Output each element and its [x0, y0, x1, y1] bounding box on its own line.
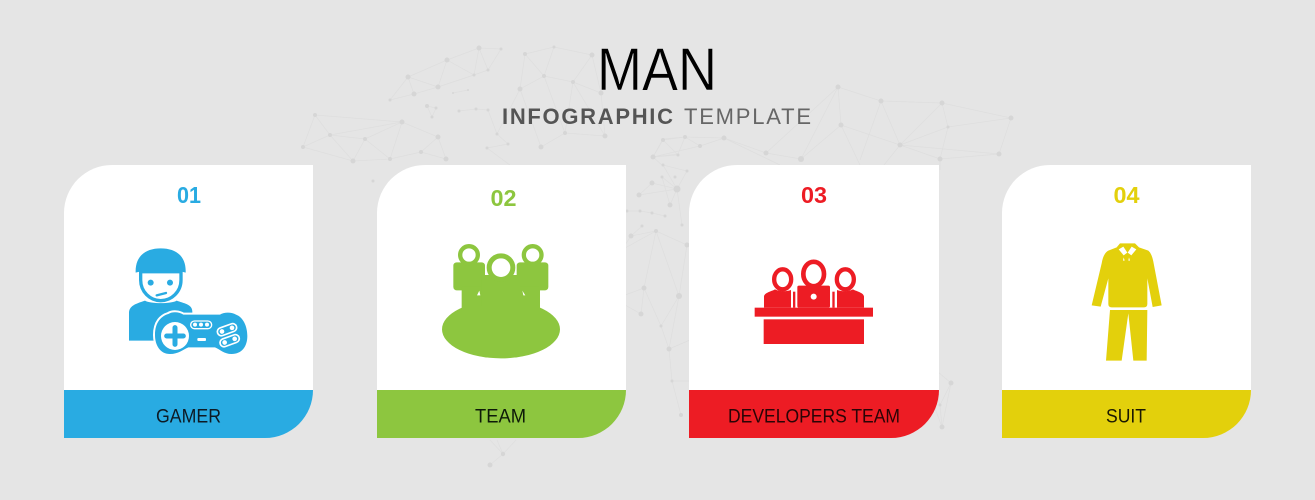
panel label band: team — [377, 390, 626, 438]
subtitle — [502, 104, 811, 129]
number 02: 02 — [490, 185, 516, 211]
panel: gamer — [64, 165, 313, 438]
label: developers team: DEVELOPERS TEAM — [728, 406, 900, 428]
number 03: 03 — [801, 182, 827, 208]
subtitle: TEMPLATE — [684, 104, 811, 129]
panel: developers team — [689, 165, 939, 438]
label: suit: SUIT — [1106, 406, 1146, 428]
panel label band: suit — [1002, 390, 1251, 438]
icon: team around table — [442, 246, 560, 358]
panel: team — [377, 165, 626, 438]
number 04: 04 — [1114, 182, 1140, 208]
icon: suit — [1092, 243, 1162, 361]
icon: gamer with controller — [129, 248, 247, 354]
title: MAN — [597, 36, 717, 103]
panel label band: gamer — [64, 390, 313, 438]
label: gamer: GAMER — [156, 406, 221, 428]
number 01: 01 — [177, 182, 201, 208]
icon: developers at desk — [755, 262, 873, 344]
panel: suit — [1002, 165, 1251, 438]
panel label band: developers team — [689, 390, 939, 438]
subtitle: INFOGRAPHIC — [502, 104, 673, 129]
label: team: TEAM — [475, 406, 526, 428]
